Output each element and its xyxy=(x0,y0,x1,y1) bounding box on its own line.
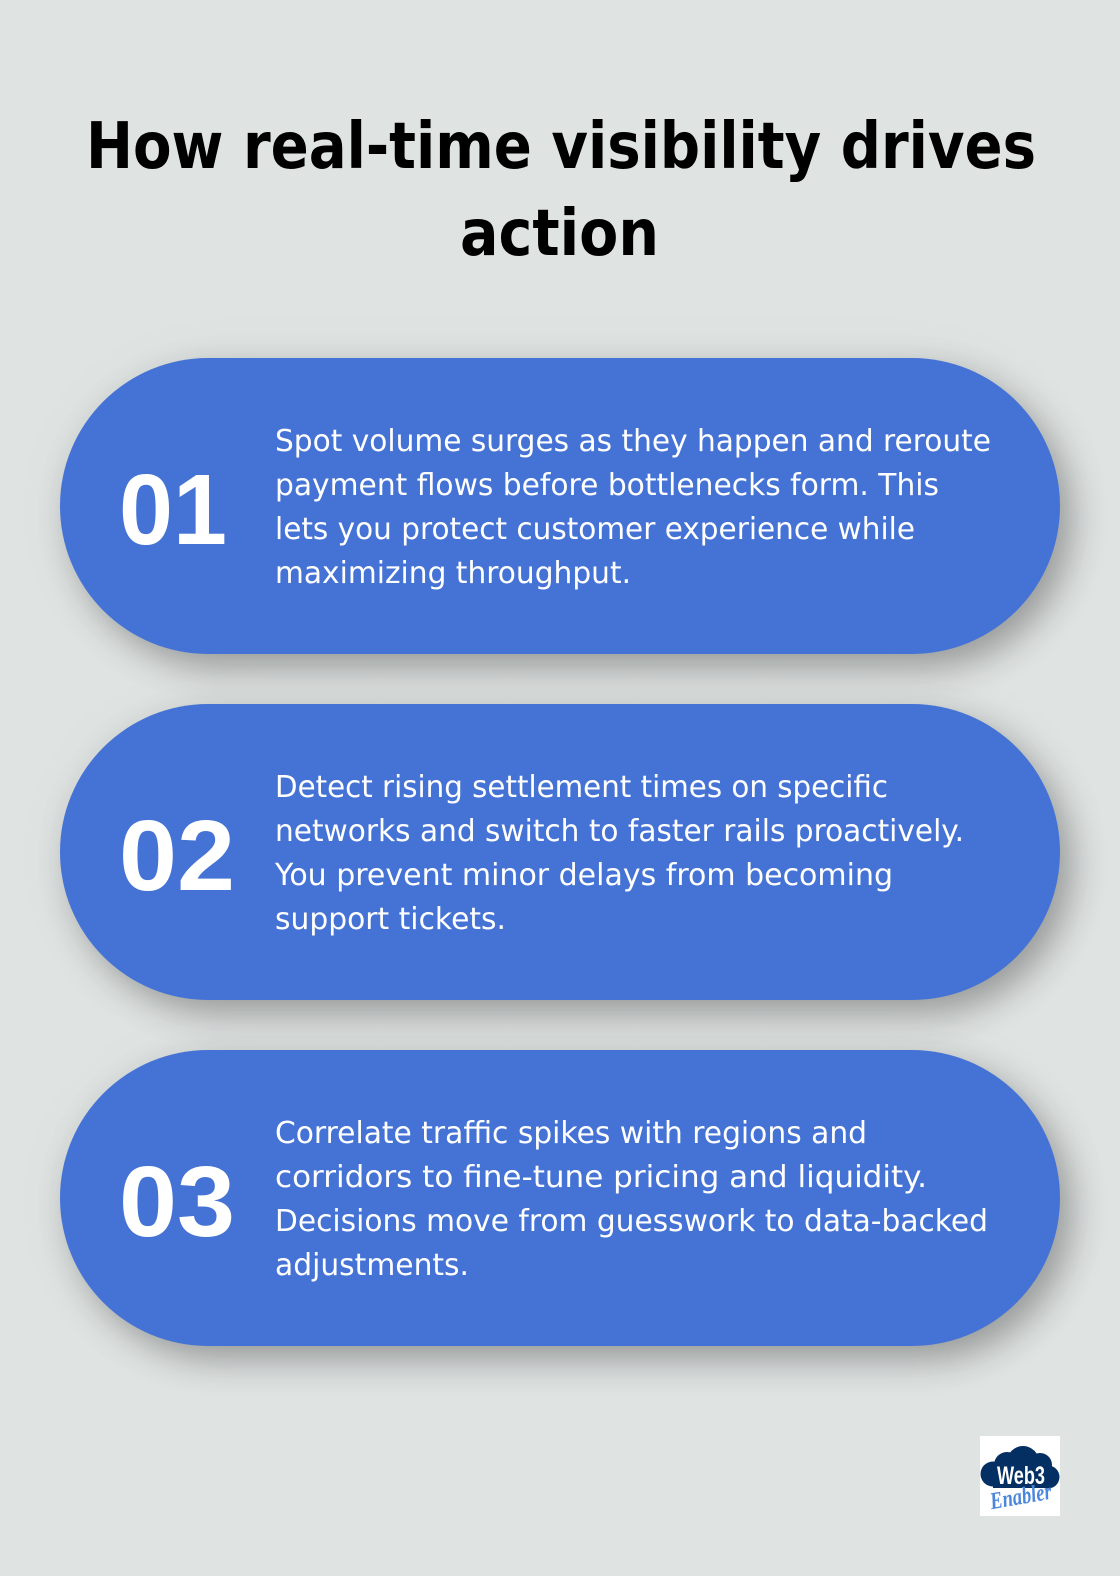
step 03 description: Decisions move from guesswork to data-backed xyxy=(275,1204,988,1239)
step number 03: 03 xyxy=(119,1146,235,1258)
step 02 description: You prevent minor delays from becoming xyxy=(274,858,893,893)
step 01 description: payment flows before bottlenecks form. This xyxy=(275,468,939,503)
step 03 description: Correlate traffic spikes with regions and xyxy=(275,1116,867,1151)
panel: step 01 xyxy=(60,358,1060,654)
step 01 description: maximizing throughput. xyxy=(275,556,631,591)
step 02 description: networks and switch to faster rails proactively. xyxy=(275,814,964,849)
title: action xyxy=(460,197,659,271)
step 01 description xyxy=(275,424,991,591)
icon: Web3 Enabler logo xyxy=(980,1436,1060,1516)
step 02 description xyxy=(274,770,964,937)
panel: step 02 xyxy=(60,704,1060,1000)
step number 02: 02 xyxy=(119,800,235,912)
step 01 description: Spot volume surges as they happen and reroute xyxy=(275,424,991,459)
step 03 description: adjustments. xyxy=(275,1248,469,1283)
step number 01: 01 xyxy=(119,454,227,566)
step 02 description: support tickets. xyxy=(275,902,506,937)
panel: step 03 xyxy=(60,1050,1060,1346)
step 02 description: Detect rising settlement times on specific xyxy=(275,770,888,805)
step 03 description xyxy=(275,1116,988,1283)
step 03 description: corridors to fine-tune pricing and liquidity. xyxy=(275,1160,927,1195)
step 01 description: lets you protect customer experience while xyxy=(275,512,915,547)
title xyxy=(86,110,1036,271)
